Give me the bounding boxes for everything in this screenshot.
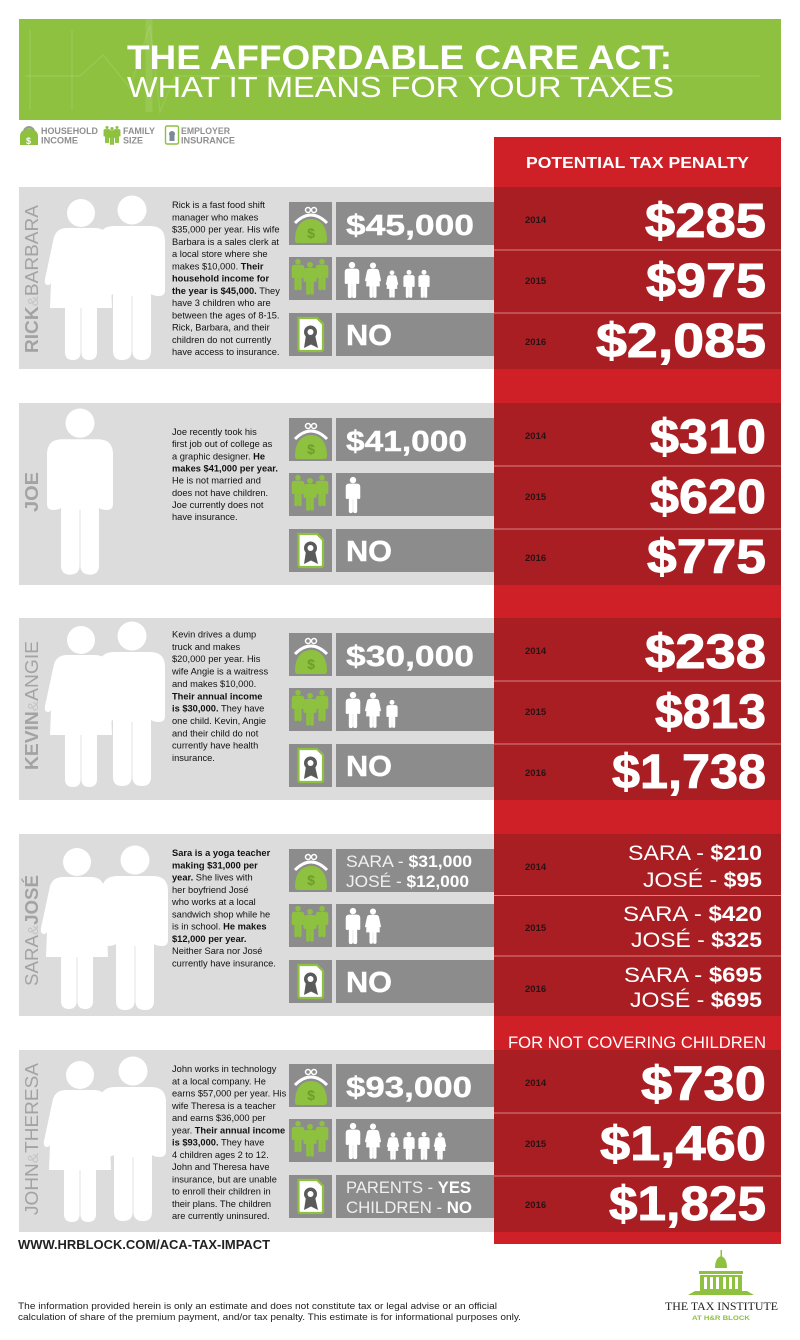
penalties: Joe: 2015 bbox=[525, 492, 547, 503]
row: household income: $ bbox=[307, 225, 315, 241]
biography text: year. She lives with bbox=[172, 872, 253, 882]
biography text: Neither Sara nor José bbox=[172, 946, 262, 956]
row: household income bbox=[289, 633, 494, 676]
biography text: children do not currently bbox=[172, 335, 272, 345]
biography text: Rick is a fast food shift bbox=[172, 200, 265, 210]
penalties: Joe bbox=[494, 403, 781, 585]
logo: capitol building bbox=[688, 1250, 754, 1295]
biography text: Barbara is a sales clerk at bbox=[172, 237, 279, 247]
legend: employer insurance: INSURANCE bbox=[181, 136, 235, 146]
penalties: Sara and Jose: 2016 bbox=[525, 984, 546, 995]
penalties: John and Theresa: 2014 bbox=[525, 1078, 547, 1089]
biography text: her boyfriend José bbox=[172, 885, 248, 895]
row: family size bbox=[289, 257, 494, 300]
disclaimer: The information provided herein is only an estimate and does not constitute tax or legal advise or an official bbox=[18, 1301, 497, 1312]
biography text: first job out of college as bbox=[172, 439, 273, 449]
figures: couple bbox=[45, 196, 165, 360]
biography text: have access to insurance. bbox=[172, 347, 280, 357]
biography text: one child. Kevin, Angie bbox=[172, 716, 266, 726]
penalties: John and Theresa bbox=[494, 1050, 781, 1232]
penalties: Kevin and Angie bbox=[494, 618, 781, 800]
row: family size bbox=[289, 688, 494, 731]
penalties: Sara and Jose: JOSÉ - $95 bbox=[643, 869, 762, 892]
row: employer insurance: NO bbox=[346, 751, 392, 783]
penalties: John and Theresa: $730 bbox=[641, 1058, 766, 1111]
row: employer insurance bbox=[289, 313, 494, 356]
penalties: Sara and Jose: 2014 bbox=[525, 862, 547, 873]
biography text: between the ages of 8-15. bbox=[172, 310, 280, 320]
penalties: John and Theresa: $1,825 bbox=[609, 1178, 766, 1231]
banner heartbeat line bbox=[25, 19, 760, 112]
penalties: Rick and Barbara: 2016 bbox=[525, 337, 546, 348]
penalties: Joe: $620 bbox=[650, 471, 766, 524]
legend: household income: HOUSEHOLD bbox=[41, 126, 98, 137]
biography text: and makes $10,000. bbox=[172, 679, 256, 689]
logo: The Tax Institute bbox=[665, 1250, 778, 1322]
row: family size bbox=[289, 904, 494, 947]
panel: Rick and Barbara bbox=[19, 187, 494, 369]
legend: employer insurance: EMPLOYER bbox=[181, 126, 230, 137]
biography text: $12,000 per year. bbox=[172, 934, 246, 944]
panel: John and Theresa bbox=[19, 1050, 494, 1232]
biography text: manager who makes bbox=[172, 212, 259, 222]
biography text: earns $57,000 per year. His bbox=[172, 1088, 287, 1098]
logo: wordmark: THE TAX INSTITUTE bbox=[665, 1299, 778, 1313]
row: employer insurance bbox=[289, 1175, 494, 1218]
row: employer insurance: NO bbox=[346, 320, 392, 352]
penalties: Rick and Barbara: $975 bbox=[646, 255, 766, 308]
row: employer insurance bbox=[289, 529, 494, 572]
biography text: makes $10,000. Their bbox=[172, 261, 263, 271]
row: employer insurance: CHILDREN - NO bbox=[346, 1198, 472, 1217]
biography text: and their child do not bbox=[172, 728, 259, 738]
figure: man bbox=[47, 408, 113, 575]
biography text: Their annual income bbox=[172, 691, 262, 701]
penalties: John and Theresa: $1,460 bbox=[600, 1118, 766, 1171]
title banner bbox=[19, 19, 781, 120]
penalties: Rick and Barbara: 2014 bbox=[525, 215, 547, 226]
biography text: year. Their annual income bbox=[172, 1125, 285, 1135]
biography text: at a local company. He bbox=[172, 1076, 266, 1086]
row: household income bbox=[289, 418, 494, 461]
legend: household income: $ bbox=[26, 136, 31, 146]
biography text: 4 children ages 2 to 12. bbox=[172, 1150, 269, 1160]
biography text: wife Angie is a waitress bbox=[171, 667, 268, 677]
website url: WWW.HRBLOCK.COM/ACA-TAX-IMPACT bbox=[18, 1238, 270, 1252]
legend: family size: SIZE bbox=[123, 136, 143, 146]
headline line 1: THE AFFORDABLE CARE ACT: bbox=[127, 39, 672, 77]
legend: household income bbox=[20, 126, 98, 146]
headline line 2: WHAT IT MEANS FOR YOUR TAXES bbox=[127, 72, 674, 104]
penalties: Sara and Jose: JOSÉ - $325 bbox=[631, 929, 762, 952]
penalties: Rick and Barbara bbox=[494, 187, 781, 369]
figures: couple bbox=[44, 1056, 166, 1222]
biography text: a local store where she bbox=[172, 249, 268, 259]
name label: KEVIN&ANGIE bbox=[21, 641, 42, 770]
row: household income: $41,000 bbox=[346, 426, 467, 458]
row: employer insurance bbox=[289, 744, 494, 787]
penalty column heading: POTENTIAL TAX PENALTY bbox=[526, 155, 750, 172]
biography text: have 3 children who are bbox=[172, 298, 271, 308]
panel: Kevin and Angie bbox=[19, 618, 494, 800]
panel: Joe bbox=[19, 403, 494, 585]
row: household income bbox=[289, 202, 494, 245]
name label: SARA&JOSÉ bbox=[21, 875, 42, 986]
penalties: Sara and Jose: SARA - $210 bbox=[628, 842, 762, 865]
biography text: to enroll their children in bbox=[172, 1186, 271, 1196]
row: employer insurance bbox=[289, 960, 494, 1003]
penalties: John and Theresa: 2016 bbox=[525, 1200, 546, 1211]
row: household income bbox=[289, 1064, 494, 1107]
biography text: Joe recently took his bbox=[172, 427, 257, 437]
penalties: Rick and Barbara: 2015 bbox=[525, 276, 547, 287]
biography text: does not have children. bbox=[172, 488, 268, 498]
legend: household income: INCOME bbox=[41, 136, 78, 146]
biography text: wife Theresa is a teacher bbox=[171, 1101, 276, 1111]
biography text: Rick, Barbara, and their bbox=[172, 322, 270, 332]
row: employer insurance: NO bbox=[346, 967, 392, 999]
penalties: Sara and Jose: SARA - $695 bbox=[624, 964, 762, 987]
disclaimer: calculation of share of the premium payment, and/or tax penalty. This estimate is for informational purposes only. bbox=[18, 1312, 521, 1323]
biography text: Joe currently does not bbox=[172, 500, 264, 510]
biography text: insurance. bbox=[172, 753, 215, 763]
biography text: $35,000 per year. His wife bbox=[172, 224, 280, 234]
penalties: Joe: 2016 bbox=[525, 553, 546, 564]
penalties: Kevin and Angie: 2015 bbox=[525, 707, 547, 718]
biography text: sandwich shop while he bbox=[172, 909, 270, 919]
row: household income: $ bbox=[307, 872, 315, 888]
biography text: is in school. He makes bbox=[172, 922, 267, 932]
biography text: Kevin drives a dump bbox=[172, 630, 256, 640]
biography text: who works at a local bbox=[171, 897, 256, 907]
biography text: currently have insurance. bbox=[172, 958, 276, 968]
name label: JOE bbox=[21, 472, 42, 512]
penalties: Kevin and Angie: $813 bbox=[655, 686, 766, 739]
penalties: Joe: 2014 bbox=[525, 431, 547, 442]
penalties: Rick and Barbara: $2,085 bbox=[596, 315, 766, 368]
row: household income: $ bbox=[307, 656, 315, 672]
biography text: is $30,000. They have bbox=[172, 704, 264, 714]
penalties: Rick and Barbara: $285 bbox=[645, 195, 766, 248]
biography text: He is not married and bbox=[172, 476, 261, 486]
legend: family size: FAMILY bbox=[123, 126, 156, 137]
biography text: John and Theresa have bbox=[172, 1162, 270, 1172]
name label: RICK&BARBARA bbox=[21, 204, 42, 353]
biography text: their plans. The children bbox=[172, 1199, 271, 1209]
row: household income bbox=[289, 849, 494, 892]
biography text: truck and makes bbox=[172, 642, 241, 652]
row: employer insurance: PARENTS - YES bbox=[346, 1178, 471, 1197]
penalties: Kevin and Angie: $1,738 bbox=[612, 746, 766, 799]
row: family size bbox=[289, 1119, 494, 1162]
biography text: is $93,000. They have bbox=[172, 1138, 264, 1148]
biography text: and earns $36,000 per bbox=[172, 1113, 266, 1123]
row: employer insurance: NO bbox=[346, 536, 392, 568]
legend: family size bbox=[104, 126, 156, 146]
biography text: John works in technology bbox=[172, 1064, 277, 1074]
row: household income: JOSÉ - $12,000 bbox=[346, 872, 469, 891]
penalties: Sara and Jose: JOSÉ - $695 bbox=[630, 989, 762, 1012]
penalties: Sara and Jose: SARA - $420 bbox=[623, 903, 762, 926]
figures: couple bbox=[41, 846, 168, 1010]
biography text: making $31,000 per bbox=[172, 860, 258, 870]
biography text: $20,000 per year. His bbox=[172, 654, 261, 664]
logo: tagline: AT H&R BLOCK bbox=[692, 1315, 750, 1322]
legend: employer insurance bbox=[166, 126, 235, 146]
biography text: household income for bbox=[172, 274, 269, 284]
note: for not covering children: FOR NOT COVERING CHILDREN bbox=[508, 1033, 766, 1052]
name label: JOHN&THERESA bbox=[21, 1062, 42, 1215]
biography text: makes $41,000 per year. bbox=[172, 463, 278, 473]
penalties: Kevin and Angie: $238 bbox=[645, 626, 766, 679]
disclaimer bbox=[18, 1301, 521, 1323]
biography text: insurance, but are unable bbox=[172, 1174, 277, 1184]
penalties: Kevin and Angie: 2016 bbox=[525, 768, 546, 779]
penalties: John and Theresa: 2015 bbox=[525, 1139, 547, 1150]
biography text: Sara is a yoga teacher bbox=[172, 848, 271, 858]
panel: Sara and Jose bbox=[19, 834, 494, 1016]
penalties: Sara and Jose bbox=[494, 834, 781, 1016]
row: household income: $30,000 bbox=[346, 641, 474, 673]
row: household income: SARA - $31,000 bbox=[346, 852, 472, 871]
penalties: Kevin and Angie: 2014 bbox=[525, 646, 547, 657]
biography text: a graphic designer. He bbox=[172, 451, 265, 461]
penalties: Sara and Jose: 2015 bbox=[525, 923, 547, 934]
figures: couple bbox=[45, 622, 165, 787]
penalties: Joe: $310 bbox=[650, 411, 766, 464]
row: household income: $ bbox=[307, 441, 315, 457]
biography text: are currently uninsured. bbox=[172, 1211, 270, 1221]
row: household income: $ bbox=[307, 1087, 315, 1103]
penalties: Joe: $775 bbox=[647, 531, 766, 584]
biography text: currently have health bbox=[172, 741, 258, 751]
row: family size bbox=[289, 473, 494, 516]
row: household income: $93,000 bbox=[346, 1072, 472, 1104]
penalty column background bbox=[494, 137, 781, 1244]
biography text: the year is $45,000. They bbox=[172, 286, 280, 296]
legend bbox=[20, 126, 235, 146]
row: household income: $45,000 bbox=[346, 210, 474, 242]
biography text: have insurance. bbox=[172, 512, 238, 522]
